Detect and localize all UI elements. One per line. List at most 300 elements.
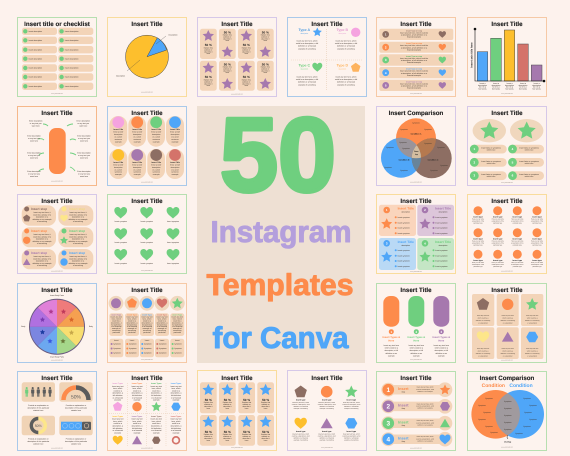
step text: could be a phrase of a [69,213,87,216]
headline number: 50 [220,97,336,214]
description text: Insert any text [141,316,153,319]
checklist labels: Insert description [28,67,42,70]
shape captions: example of something [294,439,308,442]
step pills [470,145,544,180]
type icons [312,28,360,72]
type text: Insert Types [112,382,123,385]
number circles: 4 [386,436,390,444]
step text: Step [401,440,405,443]
venn labels: Symptom [402,147,410,150]
bar labels [478,82,541,90]
descriptions: statistic or [223,67,232,70]
stat text: 50 % [205,430,212,434]
circle captions: Here you can write [511,240,523,242]
descriptions: here [206,52,210,55]
shape captions: could be a description, a full [342,403,361,406]
box text: Insert any text here [477,314,489,317]
footer: www.yourbrand.com [141,359,153,361]
heart labels [115,220,180,265]
type descriptions: example of something [337,47,355,50]
row text [400,29,428,90]
circle captions: Insert type [473,259,483,262]
stat text: 50 % [224,430,231,434]
left descriptions: or any text you [28,137,40,140]
venn labels: Symptom [384,166,392,169]
overlap label: Overlap [504,440,512,444]
footer: www.yourbrand.com [501,271,513,273]
step headings: Insert step [69,251,85,255]
row text: a description, a full definition or a [401,34,427,36]
stat text: describe it [204,405,213,408]
stat text: here [245,407,248,410]
stat text: describe it [261,405,270,408]
pill captions: Here [438,340,445,343]
stat captions [27,404,87,446]
descriptions: describe it [261,37,270,40]
box lists [395,211,448,268]
type text: description, a [132,424,142,428]
heart icons [114,207,179,260]
right descriptions: want here [80,157,88,160]
row text: Insert any text here, which could be [400,31,428,34]
pill captions [382,336,450,357]
stat text: here [206,439,210,442]
venn labels: Symptom [399,141,407,144]
shape captions: could be a description, a full [318,403,336,406]
heart labels: Insert symptom [167,262,180,265]
heading: title: Insert Title [41,287,73,294]
type descriptions: Insert any text here, which [336,76,356,78]
venn symptom labels [478,397,537,435]
shape captions: Insert any text here, which [292,432,309,435]
step text: Insert any text here, which [417,386,434,389]
step headings: Insert [398,403,409,407]
footer: www.yourbrand.com [410,182,422,184]
pill text: Enter a brief [132,131,143,134]
pill text [113,128,180,176]
shape captions: definition or a financial [320,405,335,408]
footer: www.yourbrand.com [410,448,422,450]
type descriptions: Insert any text here, which [297,76,317,78]
row text: a description, a full definition or a [401,46,427,49]
right descriptions: want here [79,125,87,128]
pill text: sentence [115,171,122,174]
stat text: describe it [242,405,251,408]
stat text: here [264,407,267,410]
venn labels: Symptom [430,169,438,172]
step headings: Insert step [31,229,47,233]
shape captions: example of something [320,439,334,442]
circle captions: Here you can write [472,261,484,264]
stat boxes [22,382,93,435]
heading: title: Insert Title [41,198,73,205]
stat text: describe it [223,437,232,440]
type text: could be a [172,389,180,392]
box lists: description [439,244,447,247]
description text: full definition [127,323,137,326]
type text: Insert any text [170,418,182,421]
type text: Insert any text [112,418,124,421]
step text: definition or an example [417,407,433,410]
orange circles [474,206,542,259]
symptom lists: Symptom [113,343,121,346]
symptom lists: Symptom [174,343,182,346]
stat text: Explain this [261,433,270,436]
type descriptions: could be a description, a full [335,78,358,81]
circle captions: a description of the [472,263,484,266]
step text: Step [401,390,405,393]
stat text: describe it [204,437,213,440]
step text: Insert facts or symptoms [481,147,501,150]
pill text: description [114,166,123,169]
circle captions: particular type [493,221,502,224]
pill text: Insert Title [151,128,161,131]
box lists: Insert symptom [398,232,410,235]
box text: definition or something [476,352,490,355]
step headings: Insert [398,436,409,440]
stat text: 50 % [243,398,250,402]
type text: here, which [113,387,122,390]
pill captions: Insert Types & [382,336,400,339]
type descriptions: example of something [298,47,316,50]
description text: could be a [143,320,151,322]
checklist labels: Insert description [65,85,78,88]
box lists: description [401,244,410,247]
circle captions: Here you can write [531,261,543,264]
step text: Insert facts or symptoms [519,160,539,163]
footer: www.yourbrand.com [410,93,422,95]
step text: description or a [72,238,84,241]
stat text: statistic or [204,435,213,438]
pill text: Insert Title [132,161,142,164]
type text: full definition [113,427,123,430]
descriptions: Explain this [204,78,213,82]
descriptions: here [225,39,229,42]
circle captions: Insert type [473,216,483,218]
step text: Insert any text here, which [417,435,434,438]
description text: or a financial [142,325,153,328]
pill text: Insert Title [170,161,180,164]
box lists: Insert symptom [435,254,448,257]
description text: or a financial [172,325,183,328]
shape captions: Insert type [347,430,356,433]
type text: example [173,399,179,402]
condition labels: Condition [509,383,533,389]
checklist labels: Insert description [65,67,78,70]
venn labels: Symptom [440,164,448,167]
box headings: Insert Title [398,240,414,244]
descriptions: statistic or [223,35,232,38]
step text: definition or an example [32,262,52,265]
footer: www.yourbrand.com [321,447,333,449]
shape captions: definition or a financial [294,437,309,440]
circle captions: particular type [473,243,483,246]
circle captions: a description of the [472,219,484,222]
shape captions: Insert type [322,430,331,433]
row number circles [382,31,389,89]
row text: Insert Type or step [406,68,423,71]
stat captions: Provide an explanation or [28,438,49,440]
type text: example [114,399,121,402]
step text: Insert facts or symptoms [519,173,539,176]
central orange pill [49,128,66,174]
step text [32,211,88,267]
description text: something [173,329,181,332]
symptom lists: Symptom [113,352,121,355]
heart labels: Insert symptom [115,262,127,265]
type text: description, a [112,424,123,428]
circle captions: a description of the [531,263,543,266]
pill text: example [134,173,141,176]
right descriptions: or any text you [77,122,89,125]
number circles: 2 [424,208,426,212]
row text: a description, a full definition or a [401,59,427,62]
pill text: sentence [171,138,179,141]
pie chart [126,35,168,78]
description boxes [109,313,184,357]
pill captions: example [413,354,420,357]
type descriptions: definition or a financial [337,45,356,48]
type text: or a financial [113,396,123,399]
box lists: Insert symptom [398,260,410,263]
step headings: Insert step [69,229,85,233]
circle captions: a description of the [511,219,524,222]
venn symptom labels: Symptom [515,432,523,435]
pie labels: Description [168,34,178,36]
step text: could be a phrase of a [33,235,51,238]
type text: description, a [151,392,162,395]
bar labels: for it in a [479,86,486,89]
number dots: 1 [390,330,392,334]
type sublabels: description [300,32,308,35]
card: six shapes [288,370,366,450]
stat text: here [225,407,229,410]
description text: description, a [127,321,137,324]
shape captions: example of something [294,407,308,410]
step numbers: 6 [512,174,514,178]
footer: www.yourbrand.com [231,447,243,449]
stat text: Explain this [242,433,251,436]
number circles: 1 [386,387,390,394]
headline: for Canva: for Canva [212,322,349,355]
description text: full definition [142,323,152,326]
descriptions: statistic or [204,48,213,51]
type descriptions: example of something [337,83,355,86]
description text: here, which [127,318,137,321]
descriptions: statistic or [204,80,213,83]
symptom lists: Symptom [159,343,167,346]
descriptions: Explain this [261,66,270,68]
symptom lists: Insert [175,339,180,342]
card: eight types grid [108,372,186,450]
shape captions [292,398,361,442]
card: eight circle pills [108,106,186,186]
row text: financial example [407,74,421,77]
venn symptom labels: Symptom [485,397,493,400]
heading: title: Insert Title [131,375,163,382]
symptom lists: Symptom [129,352,137,355]
symptom lists: Symptom [144,343,152,346]
type sublabels: description [338,32,346,35]
box headings [398,206,451,244]
left descriptions: or any text you [30,122,42,125]
right descriptions: Enter description [77,152,91,154]
card: percentage stars purple [198,18,276,96]
heart labels: Insert symptom [141,262,153,265]
card: six step pills [18,194,96,274]
pill text: sentence [153,138,160,141]
type descriptions [296,40,358,86]
shape captions: could be a description, a full [342,434,361,438]
heading: title: Insert Title [491,198,523,205]
checklist labels: Insert description [28,85,42,88]
pill text: or a short [171,136,179,138]
pill captions: definition or an [435,352,447,355]
circle captions: a description of the [531,241,543,244]
pill captions: example [388,354,395,357]
pill text: example [134,140,141,143]
symptom lists: Symptom [174,352,182,355]
circle captions: Here you can write [511,261,523,264]
type text: here, which [113,420,122,423]
row text: financial example [407,36,421,39]
step text: definition or an example [68,262,88,265]
step text: could be a phrase of a [33,257,51,260]
pill captions: Insert any text here [434,344,449,347]
descriptions: describe it [261,69,270,72]
box lists: description [439,211,447,214]
percentages: 50 % [224,62,231,66]
circle captions: Here you can write [492,261,504,264]
step text: definition or an example [417,390,433,393]
type labels [298,28,349,68]
circle captions: Insert type [513,238,522,240]
description text: or a financial [157,325,168,328]
left descriptions: Enter description [29,120,42,122]
symptom lists: Symptom [113,347,121,350]
wheel labels: Insert Body Parts [50,294,64,297]
circle captions: particular type [513,221,522,224]
left descriptions: want here [32,125,40,128]
circle captions: Insert type [513,259,522,262]
heading: title: Insert Title [491,287,523,294]
description text: description, a [142,321,152,324]
pill captions: Insert Types & [407,336,425,339]
descriptions [204,34,270,87]
type text: or a financial [151,396,162,399]
type sublabels: description [300,68,308,70]
step text: Step [401,424,405,427]
heading: comparison title: Insert Comparison [389,110,444,117]
pill captions: example [438,354,445,357]
step text: Insert any text here, it [33,211,51,214]
left descriptions: want here [30,140,38,143]
box text: definition or something [500,319,515,322]
stat captions: statistic here [71,442,81,446]
beige pills [109,116,184,179]
step headings [31,207,85,255]
venn symptom labels: Symptom [478,418,486,421]
footer: www.yourbrand.com [51,93,63,95]
step text: definition or an example [417,424,433,427]
percentages: 50 % [243,75,250,79]
pill text: or a short [133,168,141,171]
right descriptions: or any text you [78,154,90,157]
description text: particular [158,331,166,334]
step text [401,386,435,443]
step text: of something [73,220,83,223]
descriptions: describe it [223,69,232,72]
step headings: Insert step [69,207,85,211]
percentages: 50 % [224,30,231,34]
shape captions: Insert any text here, which [318,401,335,404]
type text: description, a [171,392,181,395]
stat captions: Provide an explanation or [66,404,87,407]
stat text: here [245,439,248,442]
description text: could be a [158,320,166,322]
pill text: sentence [153,171,160,174]
shape captions: could be a description, a full [292,403,310,406]
bar labels: Insert a [493,82,499,85]
number circles: 3 [386,420,390,428]
descriptions: Explain this [242,78,251,82]
card: nine hearts [108,194,186,274]
heading: title: Insert Title [491,21,523,28]
description text: something [158,329,166,332]
step headings: Insert step [31,207,47,211]
bars [477,30,542,81]
description text: Insert Type [127,314,137,316]
percentages: 50 % [262,30,269,34]
step numbers: 4 [512,147,514,151]
pill text: or a short [152,136,160,138]
row text: Insert any text here, which could be [400,57,428,60]
checklist labels [28,30,78,88]
stat text: describe it [223,405,232,408]
stat text: 50 % [224,398,231,402]
number circles: 3 [386,241,388,245]
pill text: description [152,133,161,136]
heading: title: Insert Title [131,110,163,117]
card: statistics [18,372,96,450]
pill captions: Insert any text here [409,344,424,347]
card: bar chart [468,18,546,96]
number circles [382,384,394,445]
green arrows [38,124,76,171]
checklist labels: Insert description [65,30,78,33]
shape captions: could be a description, a full [318,434,336,438]
description text: particular [174,331,181,334]
type text: Insert any text [170,385,182,388]
box lists: Insert symptom [435,260,448,263]
step text: Insert any text here, which [417,419,434,422]
venn labels: Symptom [386,146,394,149]
type descriptions: could be a description, a full [296,78,319,81]
symptom lists [111,339,182,355]
type text: full definition [132,394,142,397]
heart labels: Insert symptom [141,220,153,223]
pill text: example [153,140,160,143]
step text: definition or an example [68,240,88,243]
circle captions: Insert type [532,216,542,218]
shape captions: example of something [320,407,334,410]
venn labels: Symptom [412,122,420,124]
row bands [379,29,453,91]
type text: example [173,431,179,434]
stat text: describe it [261,437,270,440]
type text: description, a [151,424,162,428]
circle captions: Here you can write [492,218,504,220]
